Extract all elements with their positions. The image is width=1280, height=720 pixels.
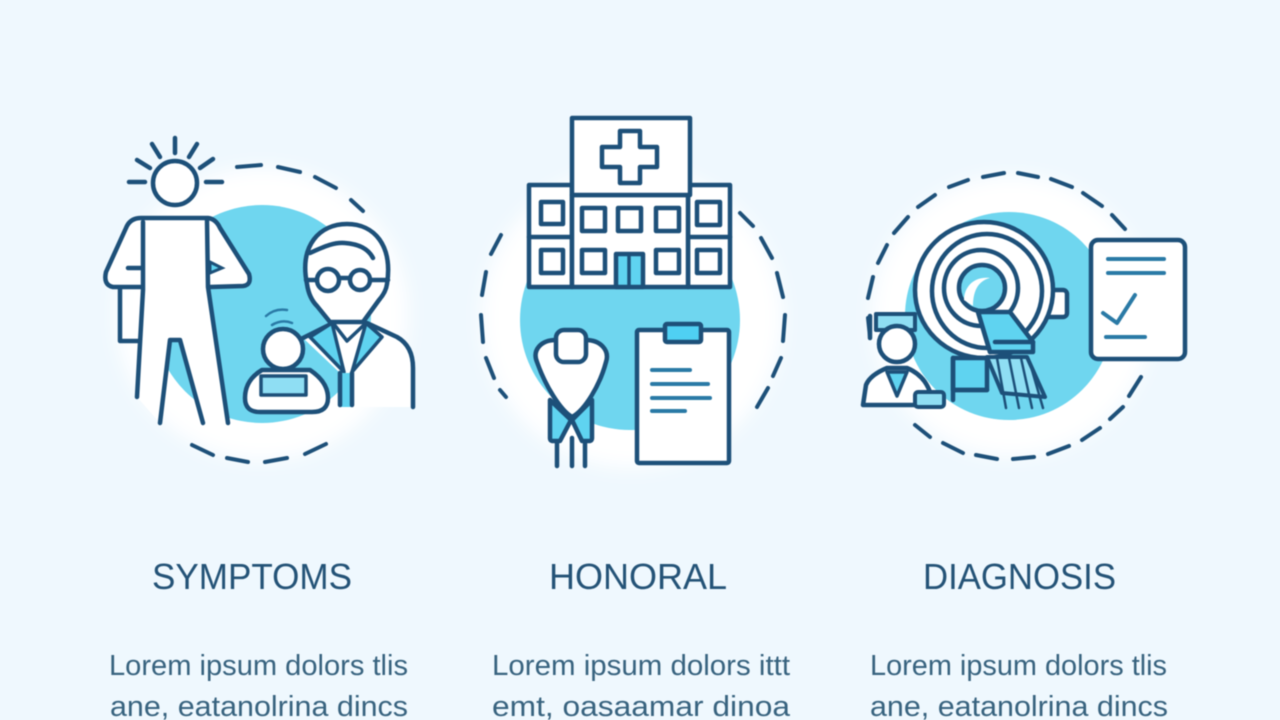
icon: checklist card bbox=[1091, 240, 1185, 359]
text block: diagnosis description: Lorem ipsum dolors tlis bbox=[870, 650, 1167, 682]
icon: patient with pain rays bbox=[105, 138, 250, 423]
icon: patient gown bbox=[536, 330, 607, 466]
icon: diagnosis backdrop bbox=[872, 176, 1152, 456]
icon: technician bbox=[863, 314, 944, 407]
text block: honoral description: Lorem ipsum dolors ittt bbox=[492, 650, 790, 682]
icon: dashed ring bbox=[481, 213, 785, 407]
icon: honoral backdrop bbox=[482, 168, 782, 468]
icon: doctor with glasses bbox=[303, 224, 413, 407]
text block: symptoms description: Lorem ipsum dolors tlis bbox=[109, 650, 408, 682]
icon: MRI scanner bbox=[915, 222, 1067, 408]
text block: symptoms description bbox=[109, 650, 408, 720]
heading: symptoms: SYMPTOMS bbox=[152, 556, 352, 597]
icon: dashed ring bbox=[868, 173, 1141, 459]
icon: clipboard with text bbox=[637, 324, 729, 463]
icon: dashed ring bbox=[192, 165, 363, 462]
panel: diagnosis bbox=[863, 173, 1185, 459]
icon: hospital building bbox=[529, 118, 730, 287]
panel: honoral bbox=[481, 118, 785, 468]
heading: honoral: HONORAL bbox=[549, 556, 727, 597]
text block: honoral description bbox=[492, 650, 791, 720]
icon: symptoms backdrop bbox=[116, 168, 408, 460]
icon: seated child bbox=[245, 310, 328, 412]
panel: symptoms bbox=[105, 138, 413, 462]
heading: diagnosis: DIAGNOSIS bbox=[923, 556, 1116, 597]
text block: diagnosis description bbox=[870, 650, 1168, 720]
